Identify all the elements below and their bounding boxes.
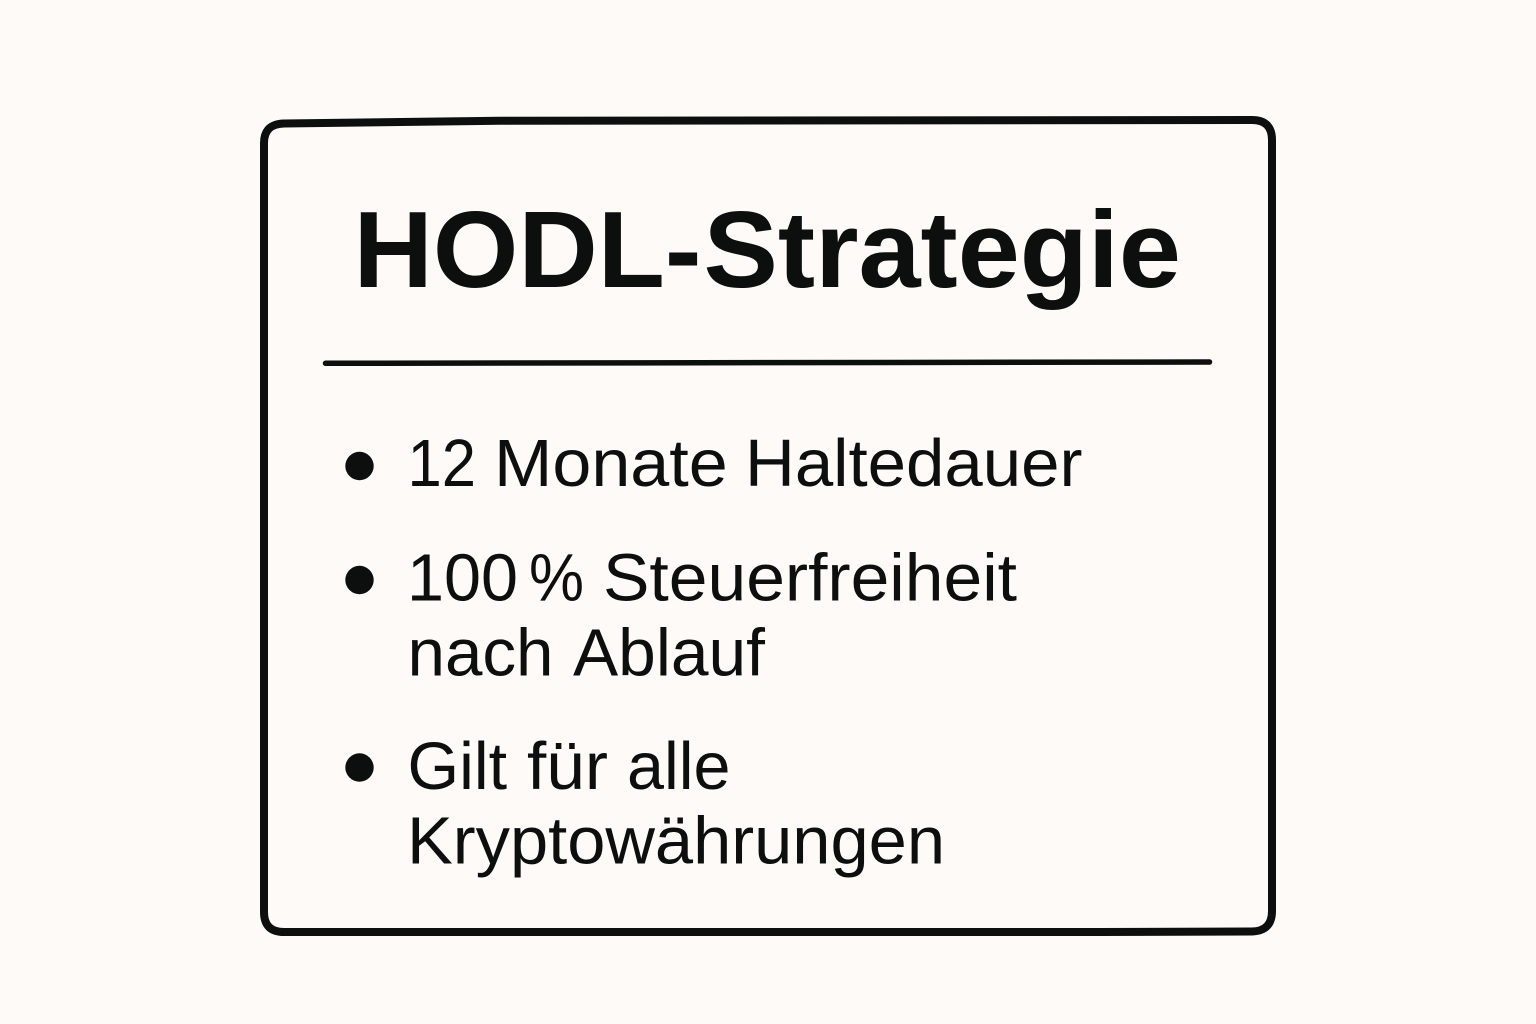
title: Strategie bbox=[704, 189, 1181, 311]
panel: HODL strategy card bbox=[264, 120, 1272, 932]
bullet item: all cryptocurrencies: für bbox=[527, 729, 608, 804]
bullet item: tax exemption bbox=[345, 540, 1017, 690]
bullet item: all cryptocurrencies: alle bbox=[627, 729, 730, 804]
bullet item: tax exemption: Ablauf bbox=[573, 616, 765, 690]
bullet item: tax exemption: 100 bbox=[407, 540, 518, 616]
title: HODL- bbox=[354, 189, 702, 311]
bullet item: all cryptocurrencies: Gilt bbox=[408, 729, 507, 804]
bullet item: all cryptocurrencies bbox=[345, 729, 945, 878]
bullet item: holding period: Haltedauer bbox=[745, 426, 1082, 501]
bullet item: tax exemption: Steuerfreiheit bbox=[603, 540, 1017, 616]
bullet item: tax exemption: nach bbox=[408, 616, 554, 690]
divider bbox=[326, 362, 1210, 363]
bullet item: holding period bbox=[345, 426, 1082, 501]
bullet list bbox=[345, 426, 1082, 878]
bullet item: holding period: Monate bbox=[494, 426, 728, 501]
bullet item: all cryptocurrencies: Kryptowährungen bbox=[407, 804, 945, 878]
title bbox=[354, 189, 1181, 311]
bullet item: holding period: 12 bbox=[408, 426, 476, 501]
card border bbox=[264, 120, 1272, 932]
bullet item: tax exemption: % bbox=[529, 540, 584, 616]
